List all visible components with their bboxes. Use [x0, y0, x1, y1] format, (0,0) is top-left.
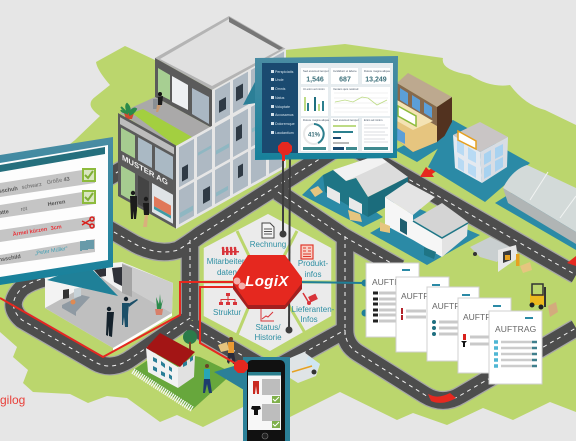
sidebar menu — [262, 63, 298, 153]
KPI labels: Dolore magna aliqua — [303, 118, 329, 122]
plant on terrace — [121, 104, 136, 119]
connector dots — [234, 230, 368, 334]
order document 4: AUFTRAG — [463, 312, 504, 322]
roof — [155, 16, 286, 90]
person on terrace — [153, 92, 163, 112]
front facade — [118, 113, 176, 228]
segment: Rechnung — [250, 223, 286, 249]
title: LogiX: LogiX — [245, 273, 289, 290]
order row 4: „Peter Müller“ — [34, 246, 68, 257]
segment: Status/Historie: Status/ — [256, 323, 281, 332]
icon: staff group — [222, 247, 239, 255]
room behind left monitor — [45, 262, 173, 351]
KPI labels: Incididunt ut labore — [333, 69, 357, 73]
windows — [153, 356, 193, 380]
order row 3: Ärmel kürzen — [12, 226, 48, 238]
KPI numbers: 1,546 — [306, 76, 324, 84]
segment: Mitarbeiterdaten — [207, 247, 248, 277]
donut gauge: 41% — [308, 132, 321, 138]
KPI labels: Dolore magna aliqua — [364, 69, 390, 73]
panel: left order monitor — [0, 137, 118, 296]
KPI numbers: 13,249 — [365, 76, 387, 84]
line chart — [334, 93, 388, 112]
sidebar menu: Unde — [275, 78, 284, 82]
upper floor left face — [155, 58, 212, 128]
order row 2 — [0, 190, 96, 219]
bar chart — [304, 97, 324, 111]
order row 3 — [0, 216, 95, 242]
picket fence — [133, 371, 192, 409]
building: office tower — [453, 122, 508, 183]
order row 1: schwarz — [21, 182, 42, 191]
order document 1: AUFTRAG — [372, 277, 413, 287]
platform: hangar — [495, 175, 576, 250]
icon: invoice document — [262, 223, 274, 238]
sidebar menu: Omnis — [275, 87, 286, 91]
building: hangar — [503, 165, 576, 244]
hexagon base — [202, 212, 333, 353]
phone body — [247, 360, 285, 441]
order row 1: Größe 43 — [46, 176, 70, 186]
desk — [62, 287, 90, 316]
segment: Produktinfos: infos — [305, 270, 321, 279]
text card — [364, 125, 388, 150]
terrace — [120, 97, 212, 147]
panel: phone — [214, 357, 290, 441]
dark line to invoice — [282, 150, 284, 234]
delivery van with worker — [470, 237, 532, 273]
connector lines — [0, 150, 365, 366]
red arrow on road right — [567, 256, 576, 266]
segment: Mitarbeiterdaten: daten — [217, 268, 237, 277]
order document 5: AUFTRAG — [495, 324, 536, 334]
monitor screen — [0, 145, 108, 277]
sidebar menu: Accusamus — [275, 113, 294, 117]
segment: Struktur — [213, 293, 241, 317]
white van on road — [290, 352, 320, 383]
icon: barcode — [81, 240, 93, 251]
green roof — [132, 109, 192, 146]
panel: order documents — [366, 263, 542, 384]
sign: Muster AG: MUSTER AG — [122, 153, 168, 187]
segment: Lieferanteninfos: Infos — [300, 315, 318, 324]
sidebar menu: Laudantium — [275, 131, 294, 135]
courier with parcel — [218, 337, 236, 364]
progress bars — [333, 125, 357, 150]
red line to phone — [200, 287, 242, 366]
teal line to orders — [296, 282, 365, 283]
businessmen — [106, 297, 138, 337]
dark line to status — [289, 150, 290, 330]
dashboard content — [298, 63, 393, 153]
order row 4 — [0, 239, 95, 266]
segment: Rechnung: Rechnung — [250, 240, 286, 249]
KPI labels: Veniam quis nostrud — [333, 87, 359, 91]
order row 2: Herren — [47, 199, 66, 208]
segment: Produktinfos — [298, 245, 328, 279]
segment: Produktinfos: Produkt- — [298, 259, 328, 268]
tree — [183, 330, 197, 352]
platform: warehouse one — [302, 175, 383, 227]
segment: Mitarbeiterdaten: Mitarbeiter- — [207, 257, 248, 266]
red stem below dashboard node — [282, 155, 285, 161]
segment: Lieferanteninfos — [292, 293, 335, 324]
sidebar menu: Perspiciatis — [275, 70, 294, 74]
red arrow on road bottom — [428, 393, 456, 403]
segment: Status/Historie — [254, 309, 282, 342]
potted plant — [155, 294, 163, 315]
hexagon hub — [202, 212, 335, 353]
phone screen — [248, 372, 281, 430]
KPI labels: Sed eiusmod tempor — [333, 118, 359, 122]
platform: brown store — [395, 120, 467, 162]
order document 1 — [366, 263, 419, 337]
order document 3 — [427, 287, 479, 361]
KPI labels: Enim ad minim — [364, 118, 383, 122]
panel: dashboard monitor — [243, 56, 398, 160]
order row 2: rot — [20, 206, 28, 213]
wardrobe — [92, 264, 132, 297]
red line to left room — [0, 282, 238, 357]
brand text: gilog — [0, 393, 25, 407]
order document 2 — [396, 277, 449, 352]
order row 3: 3cm — [50, 224, 62, 232]
phone pointer — [214, 363, 244, 390]
sidebar menu: Natus — [275, 96, 285, 100]
order document 2: AUFTRAG — [401, 291, 442, 301]
building: warehouse one — [310, 155, 408, 222]
people at entrance — [130, 191, 149, 227]
right facade — [176, 48, 286, 229]
platform: office tower — [428, 120, 530, 202]
roof — [146, 333, 195, 367]
sidebar menu: Doloremque — [275, 122, 295, 126]
red node on dashboard — [278, 142, 292, 155]
platform: warehouse two — [370, 207, 480, 265]
dashboard pointer — [243, 80, 256, 105]
customer figure — [203, 364, 212, 393]
icon: line chart — [261, 309, 274, 321]
segment: Lieferanteninfos: Lieferanten- — [292, 305, 335, 314]
forklift with pallet — [530, 284, 558, 317]
KPI numbers — [306, 76, 387, 84]
building: Muster AG headquarters — [118, 16, 286, 229]
monitor frame — [0, 137, 113, 285]
panel: LogiX hub octagon — [233, 255, 302, 309]
road network — [14, 140, 576, 400]
KPI numbers: 687 — [339, 76, 351, 84]
building: brown store — [397, 73, 452, 152]
lawn — [133, 350, 233, 410]
sidebar menu: Voluptate — [275, 105, 290, 109]
icon: scissors — [82, 217, 94, 228]
order row 1 — [0, 168, 96, 197]
red node on phone — [234, 360, 248, 373]
icon: org chart — [219, 293, 237, 305]
order document 5 — [489, 311, 542, 384]
order document 4 — [458, 298, 511, 373]
house — [133, 330, 236, 410]
icon: product sheet — [301, 245, 313, 259]
red arrow on road upper — [420, 162, 444, 177]
segment: Status/Historie: Historie — [254, 333, 282, 342]
segment: Struktur: Struktur — [213, 308, 241, 317]
KPI labels: Ut enim ad minim — [303, 87, 325, 91]
order document 3: AUFTRAG — [432, 301, 473, 311]
walls — [146, 348, 178, 388]
KPI labels — [303, 69, 390, 122]
icon: hand truck — [303, 293, 318, 305]
monitor pointer — [47, 264, 118, 296]
building: warehouse two — [380, 182, 468, 259]
dashboard frame — [255, 56, 398, 160]
KPI labels: Sed eiusmod tempor — [303, 69, 329, 73]
phone home button — [262, 433, 268, 439]
